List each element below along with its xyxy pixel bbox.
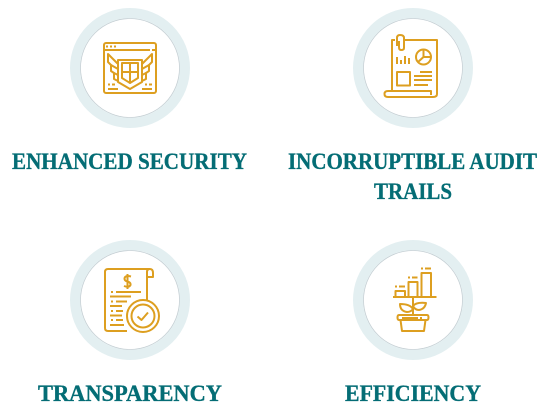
icon ring bbox=[75, 13, 185, 123]
icon ring bbox=[358, 13, 468, 123]
panel: enhanced security bbox=[12, 13, 247, 175]
heading line 2: TRAILS bbox=[374, 179, 452, 205]
panel: incorruptible audit trails bbox=[288, 13, 537, 205]
icon: report with paperclip bbox=[384, 35, 437, 97]
panel: transparency bbox=[38, 245, 222, 407]
icon ring bbox=[75, 245, 185, 355]
heading: TRANSPARENCY bbox=[38, 381, 222, 407]
panel: efficiency bbox=[345, 245, 481, 407]
heading: ENHANCED SECURITY bbox=[12, 149, 247, 175]
icon: shield in browser window bbox=[104, 43, 156, 93]
heading: EFFICIENCY bbox=[345, 381, 481, 407]
icon: plant with rising bars bbox=[393, 268, 436, 331]
icon ring bbox=[358, 245, 468, 355]
icon: receipt with approval seal bbox=[105, 269, 159, 332]
